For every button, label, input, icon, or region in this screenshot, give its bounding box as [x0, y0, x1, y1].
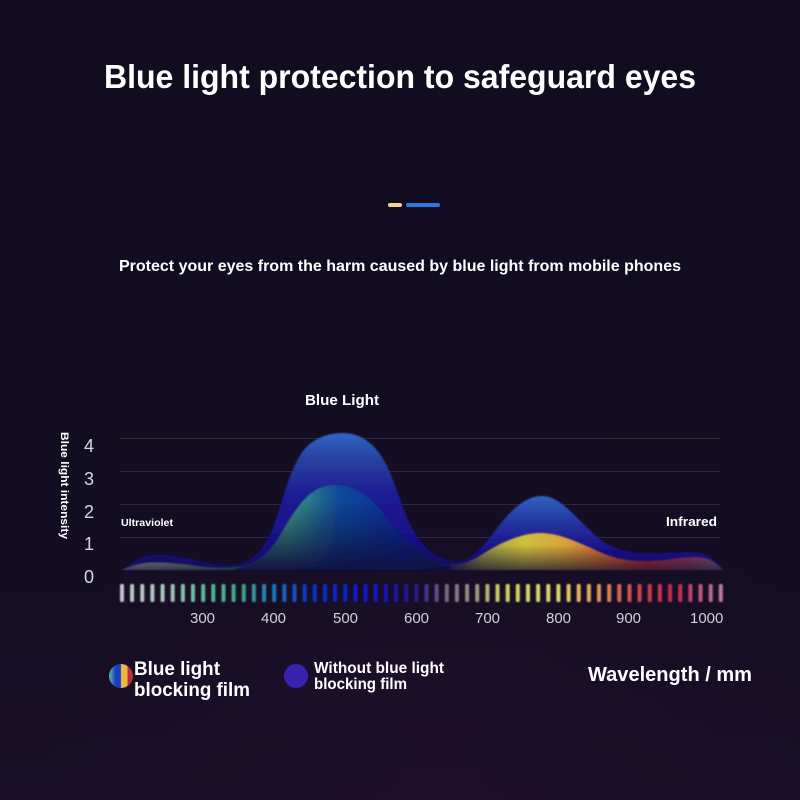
x axis labels: 1000 — [690, 610, 723, 627]
legend: blue light blocking film — [109, 659, 250, 701]
x axis labels: 400 — [261, 610, 286, 627]
legend: blue light blocking film: blocking film — [134, 680, 250, 701]
x axis labels: 600 — [404, 610, 429, 627]
chart: blue light intensity by wavelength — [58, 392, 723, 627]
y axis labels: 4 — [84, 436, 94, 456]
x axis labels: 900 — [616, 610, 641, 627]
x axis title: Wavelength / mm — [588, 664, 752, 686]
label: ultraviolet: Ultraviolet — [121, 518, 174, 529]
y axis labels: 1 — [84, 534, 94, 554]
legend: without blue light blocking film — [284, 660, 445, 693]
label: infrared: Infrared — [666, 514, 717, 529]
y axis title: Blue light intensity — [58, 432, 70, 540]
legend: blue light blocking film: Blue light — [134, 659, 221, 680]
title: Blue light protection to safeguard eyes — [104, 58, 696, 95]
legend: without blue light blocking film: Without blue light — [314, 660, 445, 677]
x axis labels: 300 — [190, 610, 215, 627]
label: blue light: Blue Light — [305, 392, 379, 409]
x axis labels: 500 — [333, 610, 358, 627]
icon: indigo circle — [284, 664, 308, 688]
spectrum tick bar — [120, 584, 723, 602]
x axis labels: 800 — [546, 610, 571, 627]
x axis labels — [190, 610, 723, 627]
subtitle: Protect your eyes from the harm caused by blue light from mobile phones — [119, 258, 681, 275]
legend: without blue light blocking film: blocking film — [314, 676, 407, 693]
accent bars — [388, 203, 440, 207]
y axis labels: 0 — [84, 567, 94, 587]
icon: rainbow circle — [109, 664, 133, 688]
y axis labels: 2 — [84, 502, 94, 522]
area: without blue light blocking film — [122, 433, 723, 570]
area: with blue light blocking film — [122, 485, 723, 570]
y axis labels: 3 — [84, 469, 94, 489]
x axis labels: 700 — [475, 610, 500, 627]
y axis labels — [84, 436, 94, 587]
